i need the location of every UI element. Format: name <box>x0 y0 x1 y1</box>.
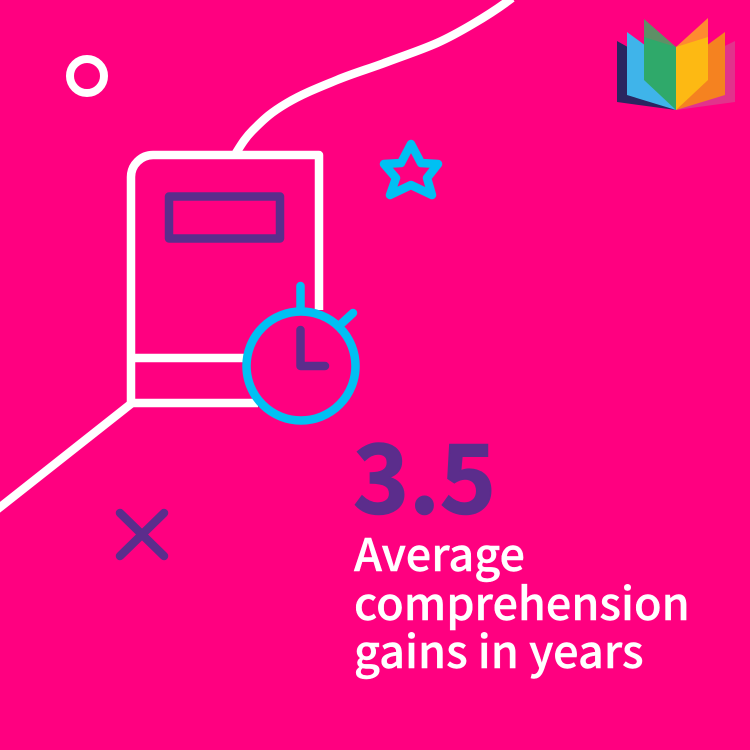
book label <box>169 196 280 238</box>
description line 3: gains in years <box>354 616 644 681</box>
big number: 3.5 <box>353 404 496 541</box>
stopwatch face <box>246 312 356 420</box>
diagonal line from book to left edge <box>0 403 132 512</box>
icon: book <box>131 155 319 403</box>
icon: cross <box>120 513 164 556</box>
curved line from top right to book <box>236 0 512 153</box>
logo: open book <box>617 18 735 110</box>
stopwatch side button <box>341 313 353 324</box>
book cover <box>131 155 319 403</box>
icon: stopwatch <box>246 286 356 420</box>
description text <box>354 519 690 681</box>
icon: circle outline <box>70 59 104 93</box>
icon: star <box>384 144 438 195</box>
stopwatch top button <box>296 286 305 309</box>
book spine band <box>131 354 248 362</box>
description line 2: comprehension <box>354 568 690 633</box>
description line 1: Average <box>354 519 525 584</box>
stopwatch hands <box>300 330 325 366</box>
